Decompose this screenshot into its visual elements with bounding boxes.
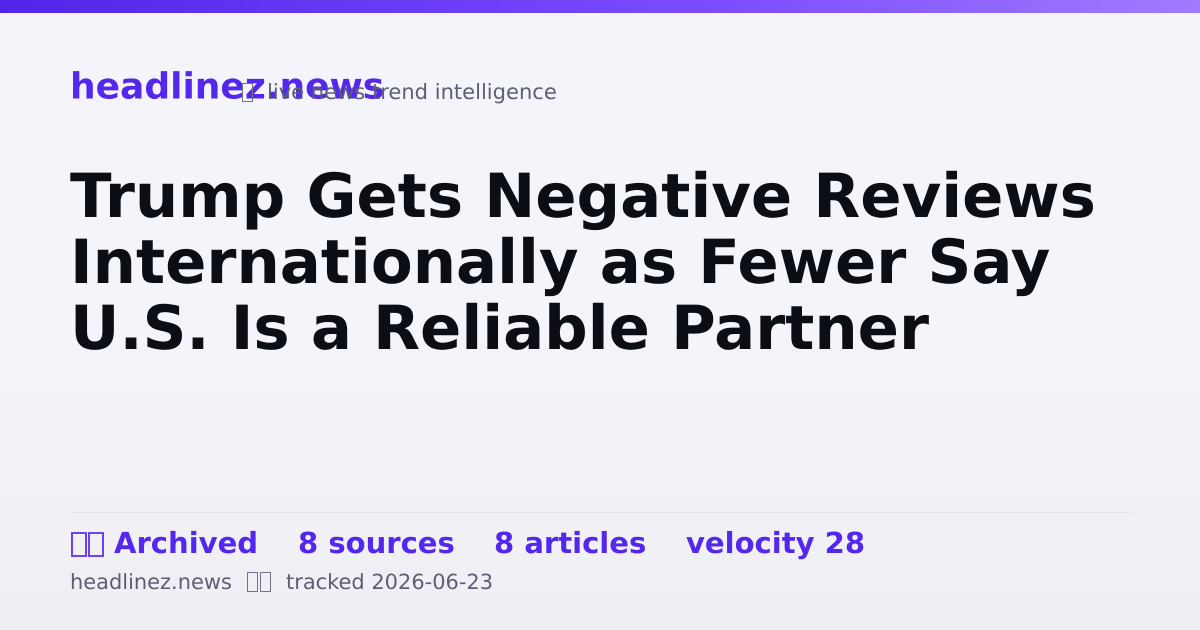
stats row <box>71 526 865 560</box>
title <box>70 161 1096 364</box>
icon: archived missing glyph boxes <box>71 532 104 557</box>
stat: velocity: velocity 28 <box>686 526 865 560</box>
stat: archived: Archived <box>114 526 258 560</box>
top accent bar <box>0 0 1200 13</box>
title: U.S. Is a Reliable Partner <box>70 293 929 364</box>
divider <box>70 512 1132 513</box>
title: Internationally as Fewer Say <box>70 227 1050 298</box>
stat: sources: 8 sources <box>298 526 455 560</box>
brand name: headlinez.news <box>70 66 384 108</box>
icon: date missing glyph boxes <box>247 572 271 592</box>
footer date: tracked 2026-06-23 <box>286 570 493 594</box>
footer source and date <box>70 570 493 594</box>
icon: missing glyph box <box>242 83 253 102</box>
tagline text: live news trend intelligence <box>267 79 557 104</box>
tagline <box>242 79 557 104</box>
stat: articles: 8 articles <box>494 526 646 560</box>
footer source: headlinez.news <box>70 570 232 594</box>
title: Trump Gets Negative Reviews <box>70 161 1096 232</box>
